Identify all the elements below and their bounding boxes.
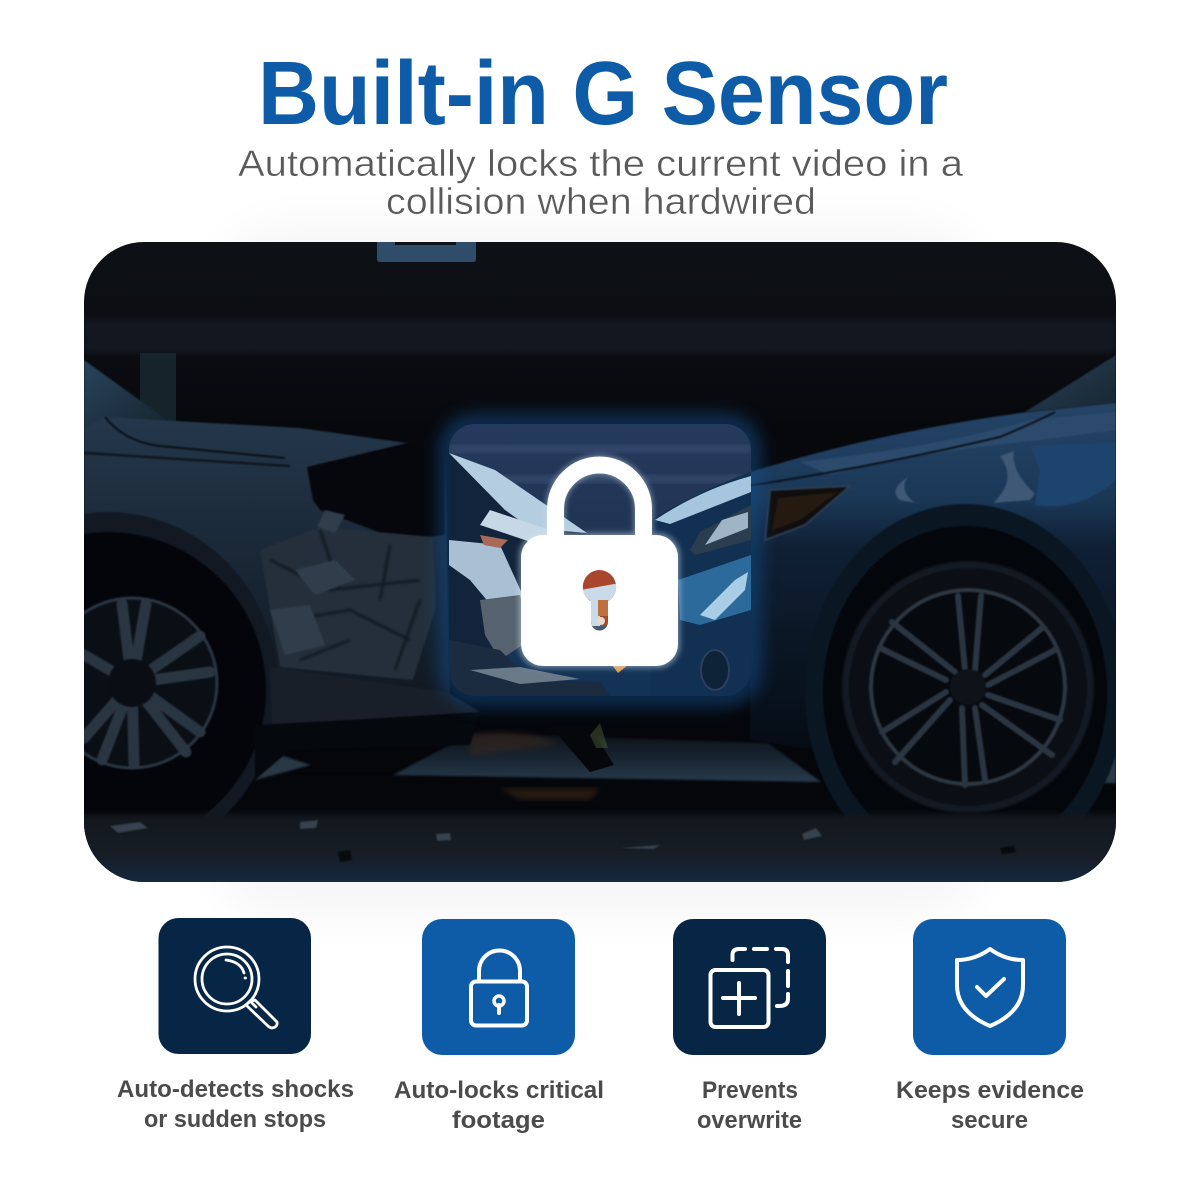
right car: [750, 355, 1116, 815]
caption: [394, 1077, 604, 1134]
caption: Auto-locks critical: [394, 1077, 604, 1104]
icon tile: copy plus: [673, 919, 826, 1055]
icon: big white padlock: [519, 465, 680, 668]
feature 3: prevents overwrite: [673, 919, 826, 1134]
keyhole: [582, 570, 616, 630]
caption: Auto-detects shocks: [117, 1076, 354, 1103]
caption: or sudden stops: [144, 1106, 326, 1133]
left wheel: [84, 596, 219, 770]
subtitle: collision when hardwired: [386, 181, 816, 222]
subtitle: [238, 143, 963, 222]
pavement: [256, 734, 1116, 784]
glowing centre panel: [449, 424, 751, 700]
feature 4: keeps evidence: [896, 919, 1084, 1134]
arch: [84, 512, 268, 864]
feature 1: detects shocks: [117, 918, 354, 1133]
body reflections: [896, 477, 915, 503]
caption: Prevents: [702, 1077, 798, 1104]
right wheel: [841, 560, 1095, 814]
subtitle: Automatically locks the current video in a: [238, 143, 963, 184]
caption: secure: [951, 1107, 1028, 1134]
right car bright: [652, 472, 751, 578]
garage sign: [377, 242, 476, 262]
icon tile: padlock: [422, 919, 575, 1055]
caption: footage: [452, 1107, 545, 1134]
crash hole: [307, 443, 445, 540]
icon tile: shield: [913, 919, 1066, 1055]
crumpled panel: [260, 527, 436, 680]
feature 2: locks footage: [394, 919, 604, 1134]
soft background shadow: [220, 225, 980, 915]
caption: [697, 1077, 802, 1134]
arch: [808, 504, 1116, 815]
left car bright: [449, 453, 587, 648]
caption: overwrite: [697, 1107, 802, 1134]
bumper: [274, 694, 479, 724]
title: Built-in G Sensor: [258, 44, 948, 144]
panel: crash photo: [84, 242, 1116, 882]
indicator: [765, 486, 850, 540]
caption: [896, 1077, 1084, 1134]
caption: Keeps evidence: [896, 1077, 1084, 1104]
left car: [84, 360, 479, 864]
icon tile: magnifier: [158, 918, 311, 1054]
caption: [117, 1076, 354, 1133]
road surface with debris: [84, 814, 1116, 882]
